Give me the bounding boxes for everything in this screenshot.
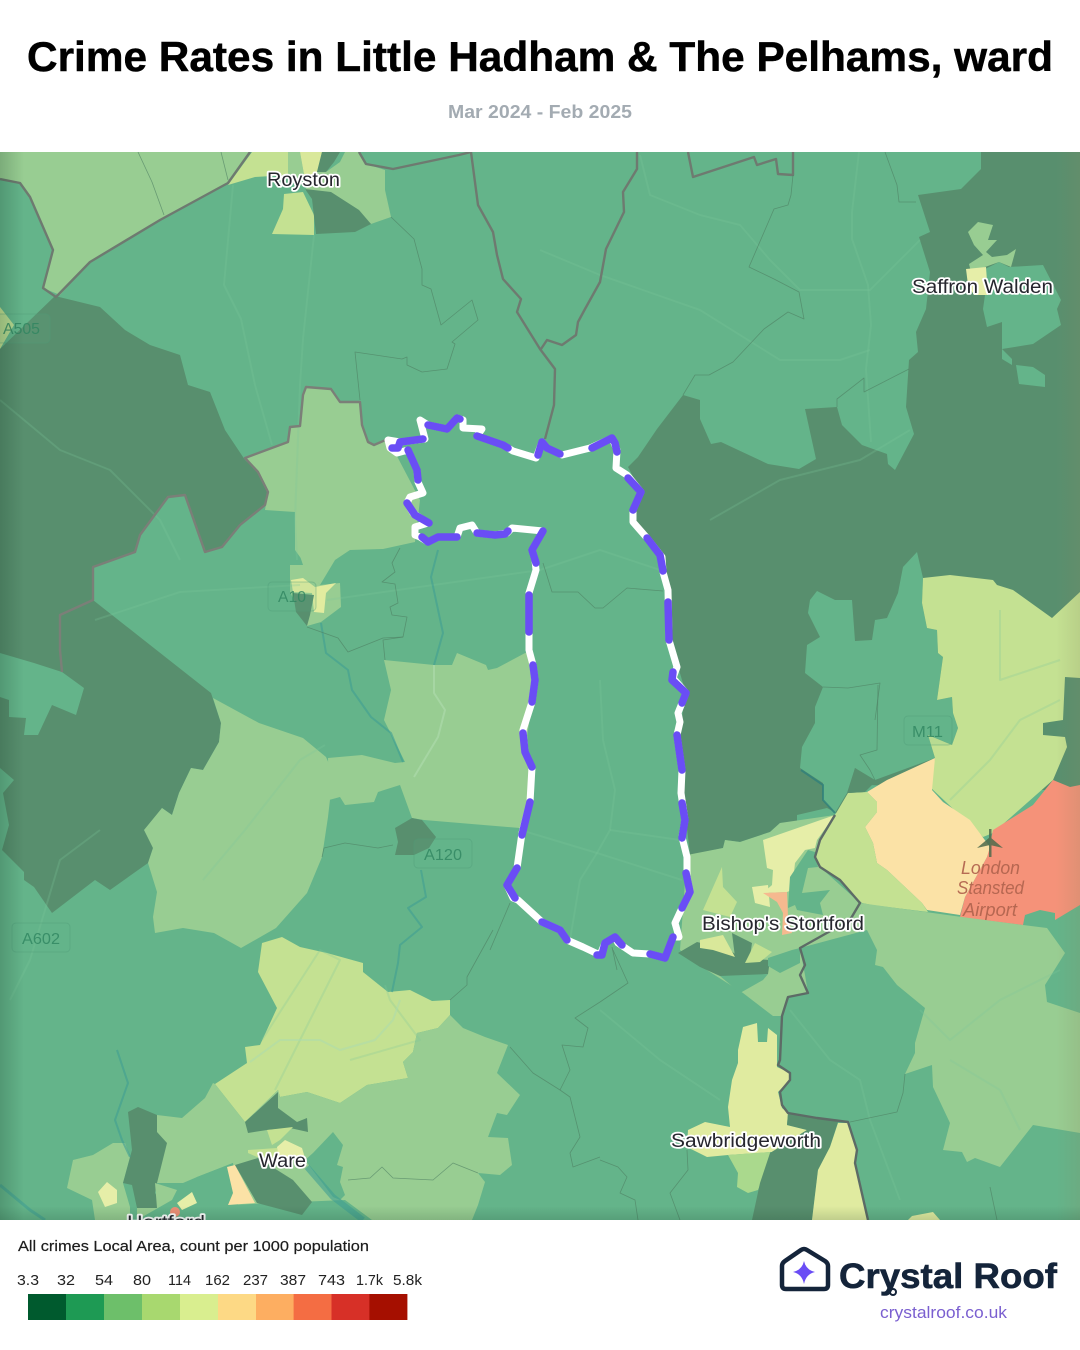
- legend scale values: 80: [133, 1272, 151, 1289]
- region: small dark patch by the A120: [395, 818, 436, 855]
- region: Ware surrounding light area: [155, 1015, 520, 1220]
- region: Saffron Walden: [966, 222, 1061, 387]
- region: Stansted salmon area: [960, 780, 1080, 925]
- title: Crime Rates in Little Hadham & The Pelhams, ward: [27, 33, 1053, 80]
- ward outline: white base line: [388, 418, 690, 958]
- legend scale values: [17, 1272, 423, 1289]
- roads: [0, 152, 1060, 1200]
- ward outline: purple dashes: [392, 418, 690, 958]
- label: London Stansted Airport: London: [961, 858, 1020, 878]
- legend scale values: 5.8k: [393, 1272, 423, 1289]
- road label: A602: A602: [22, 931, 60, 948]
- icon: house with star: [782, 1249, 828, 1289]
- legend scale values: 743: [318, 1272, 345, 1289]
- region: west green patch: [0, 653, 84, 735]
- region: light area east of the river: [328, 652, 535, 828]
- label: London Stansted Airport: Stansted: [957, 878, 1025, 898]
- logo key ring detail: [890, 1289, 896, 1295]
- road label: A505: A505: [3, 321, 40, 338]
- region: yellow-green west of cream: [815, 792, 928, 912]
- legend scale values: 162: [205, 1272, 230, 1289]
- label: Hertford: Hertford: [127, 1213, 205, 1234]
- label: London Stansted Airport: [957, 858, 1025, 920]
- legend title: All crimes Local Area, count per 1000 population: [18, 1238, 369, 1255]
- road label: A602: [12, 923, 70, 952]
- region: Bishop's Stortford town: [678, 815, 867, 1016]
- logo wordmark: Crystal Roof: [839, 1257, 1057, 1296]
- legend scale values: 1.7k: [356, 1272, 383, 1289]
- region: Royston: [228, 152, 391, 235]
- label: London Stansted Airport: Airport: [962, 900, 1018, 920]
- region: south-west light area: [144, 698, 333, 948]
- region: south-east light area: [860, 903, 1080, 1167]
- label: Saffron Walden: Saffron Walden: [912, 277, 1053, 298]
- region: Ware large yellow-green area: [215, 937, 450, 1122]
- legend scale values: 237: [243, 1272, 268, 1289]
- region: east dark area: [628, 152, 1080, 855]
- website url: crystalroof.co.uk: [880, 1304, 1008, 1322]
- road label: A10: [268, 582, 316, 611]
- region: Ware and Hertford town wards: [67, 1092, 372, 1220]
- region: M11 corridor green blob: [800, 552, 958, 813]
- subtitle: date range: Mar 2024 - Feb 2025: [448, 102, 632, 122]
- region: east yellow-green area: [922, 575, 1080, 837]
- road label: M11: M11: [912, 724, 943, 741]
- logo: Crystal Roof: [782, 1249, 1057, 1296]
- region: A505 wedge: [0, 307, 14, 349]
- region: north-west light area: [0, 152, 250, 295]
- legend scale values: 114: [168, 1272, 191, 1289]
- road label: A10: A10: [278, 589, 306, 606]
- icon: airport plane: [977, 829, 1003, 857]
- road label: A505: [0, 314, 50, 343]
- road label: M11: [904, 716, 952, 745]
- region: cream area by the airport: [865, 758, 990, 915]
- region: central light patch north of the A10: [245, 387, 420, 585]
- region: Sawbridgeworth town: [687, 1023, 940, 1220]
- road label: A120: [414, 839, 472, 868]
- legend colour bar: [28, 1294, 407, 1320]
- label: Royston: Royston: [267, 170, 340, 191]
- region: A10 town: [290, 550, 341, 626]
- label: Bishop's Stortford: Bishop's Stortford: [702, 914, 864, 935]
- thick district boundaries: [0, 152, 868, 1220]
- thin ward boundaries: [138, 152, 997, 1220]
- legend scale values: 54: [95, 1272, 113, 1289]
- rivers: [0, 550, 835, 1220]
- region: west dark area: [0, 296, 268, 913]
- legend scale values: 387: [280, 1272, 306, 1289]
- label: Ware: Ware: [259, 1151, 306, 1172]
- legend scale values: 3.3: [17, 1272, 39, 1289]
- label: Sawbridgeworth: Sawbridgeworth: [671, 1131, 821, 1152]
- road label: A120: A120: [424, 847, 462, 864]
- region: small dark patch: [848, 768, 875, 793]
- legend scale values: 32: [57, 1272, 75, 1289]
